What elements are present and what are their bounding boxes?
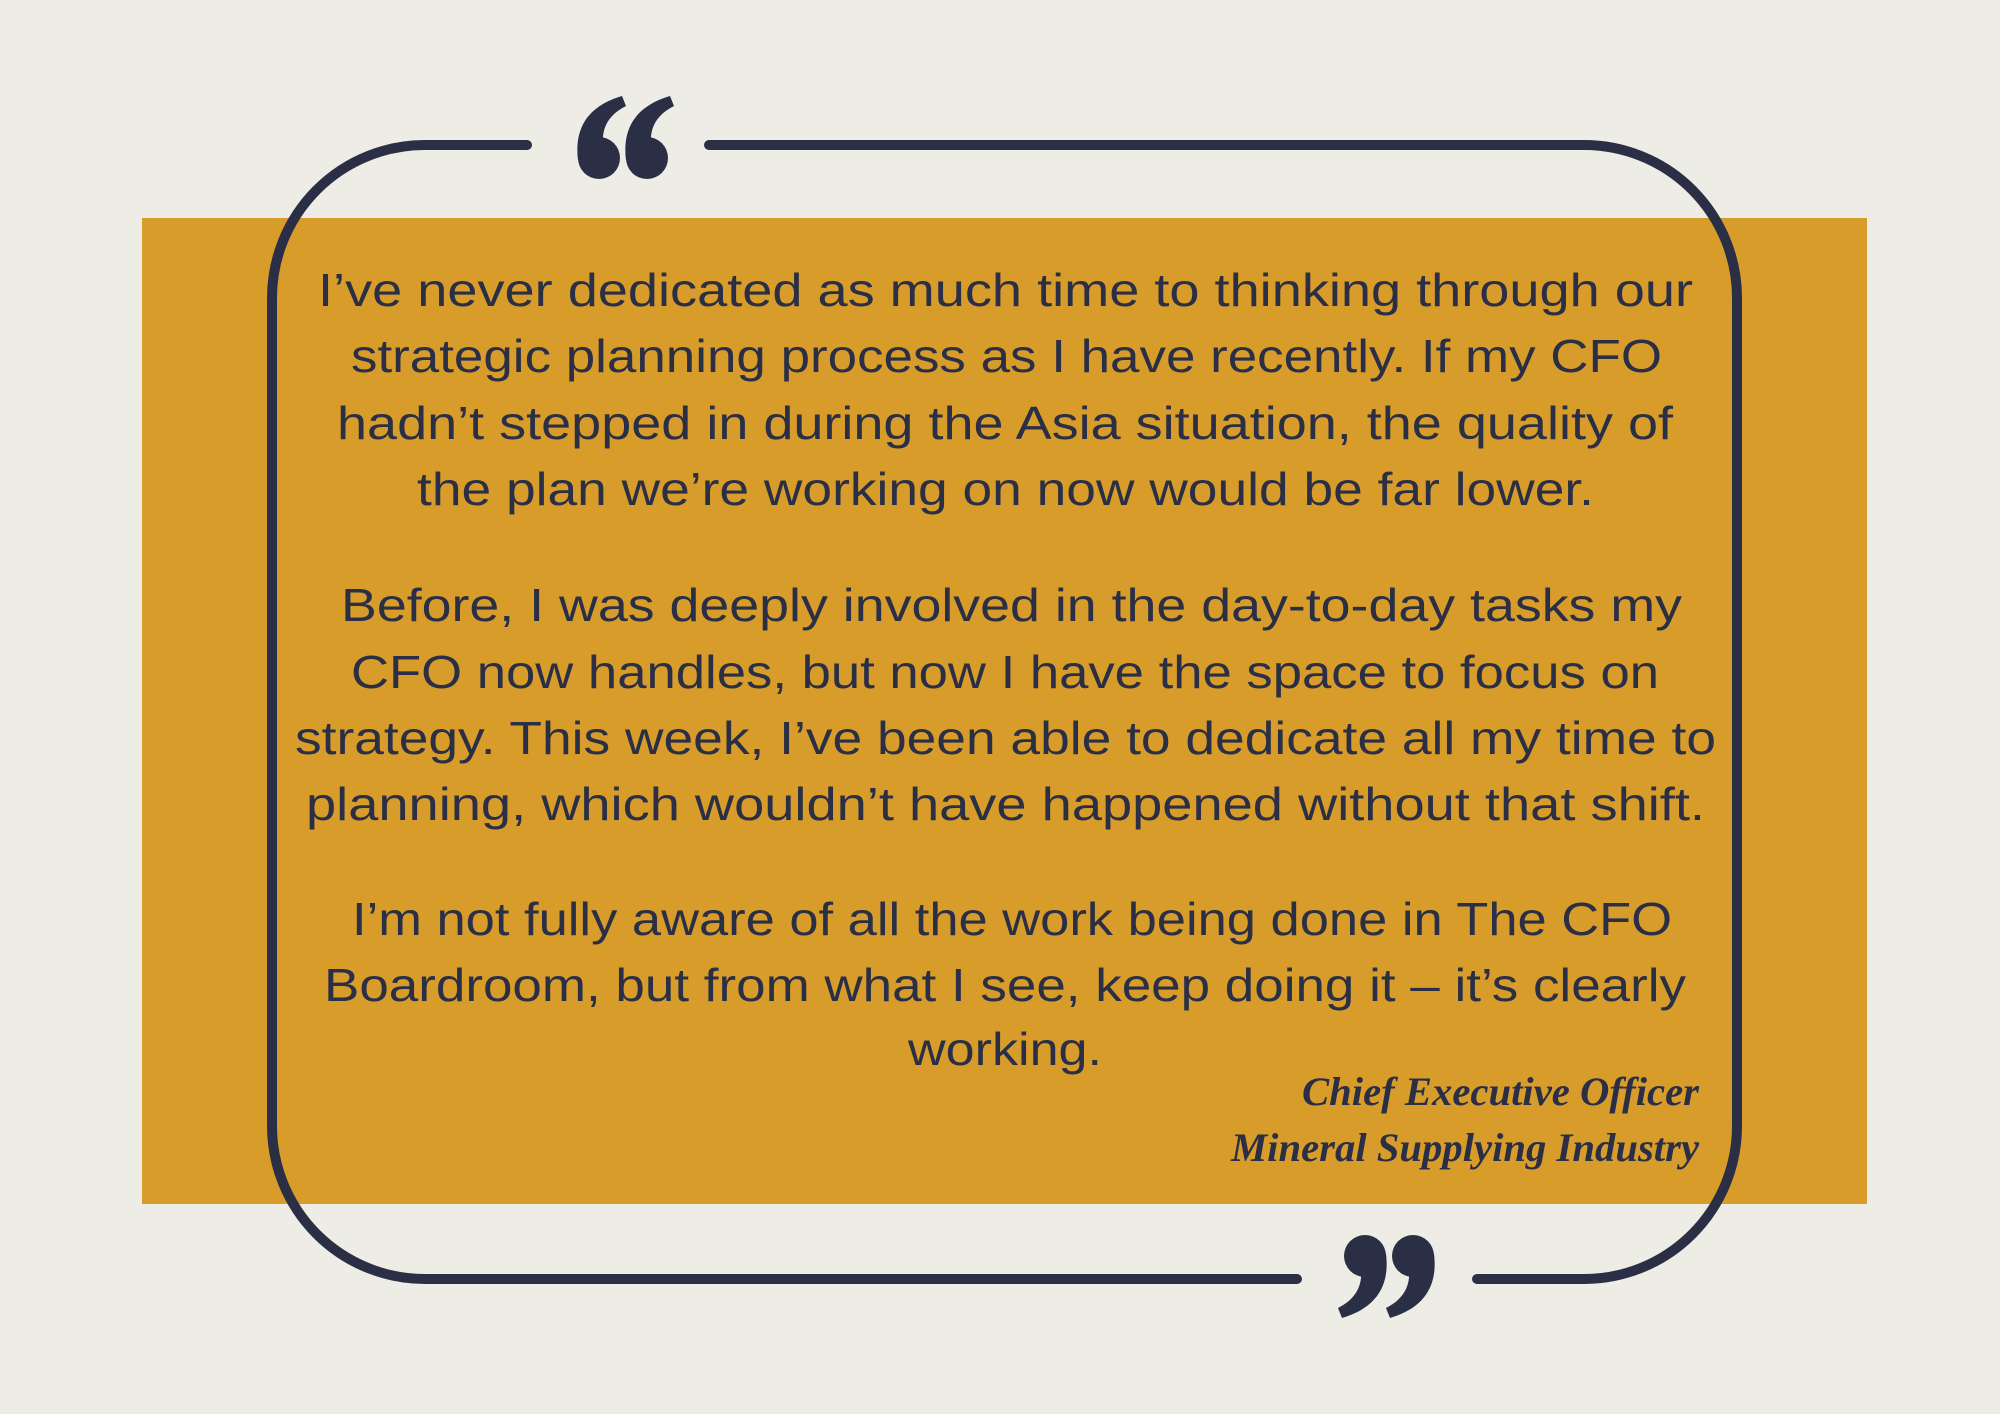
text block: quote body: working.	[907, 1023, 1102, 1075]
attribution: Chief Executive Officer	[1302, 1069, 1699, 1114]
text block: quote body	[295, 264, 1716, 1075]
icon: closing quote mark	[1338, 1235, 1435, 1318]
text block: quote body: I’m not fully aware of all the work being done in The CFO	[352, 893, 1672, 945]
text block: quote body: hadn’t stepped in during the Asia situation, the quality of	[337, 397, 1673, 449]
panel: orange background block	[142, 218, 1867, 1204]
attribution	[1230, 1069, 1699, 1170]
attribution: Mineral Supplying Industry	[1230, 1125, 1699, 1170]
text block: quote body: planning, which wouldn’t have happened without that shift.	[306, 778, 1705, 830]
text block: quote body: I’ve never dedicated as much time to thinking through our	[318, 264, 1693, 316]
text block: quote body: strategic planning process as I have recently. If my CFO	[351, 330, 1662, 382]
icon: opening quote mark	[577, 96, 674, 179]
text block: quote body: CFO now handles, but now I have the space to focus on	[351, 646, 1659, 698]
text block: quote body: Boardroom, but from what I see, keep doing it – it’s clearly	[324, 959, 1686, 1011]
text block: quote body: Before, I was deeply involved in the day-to-day tasks my	[341, 579, 1682, 631]
text block: quote body: strategy. This week, I’ve been able to dedicate all my time to	[295, 712, 1716, 764]
quote frame	[272, 145, 1737, 1279]
text block: quote body: the plan we’re working on now would be far lower.	[417, 463, 1594, 515]
